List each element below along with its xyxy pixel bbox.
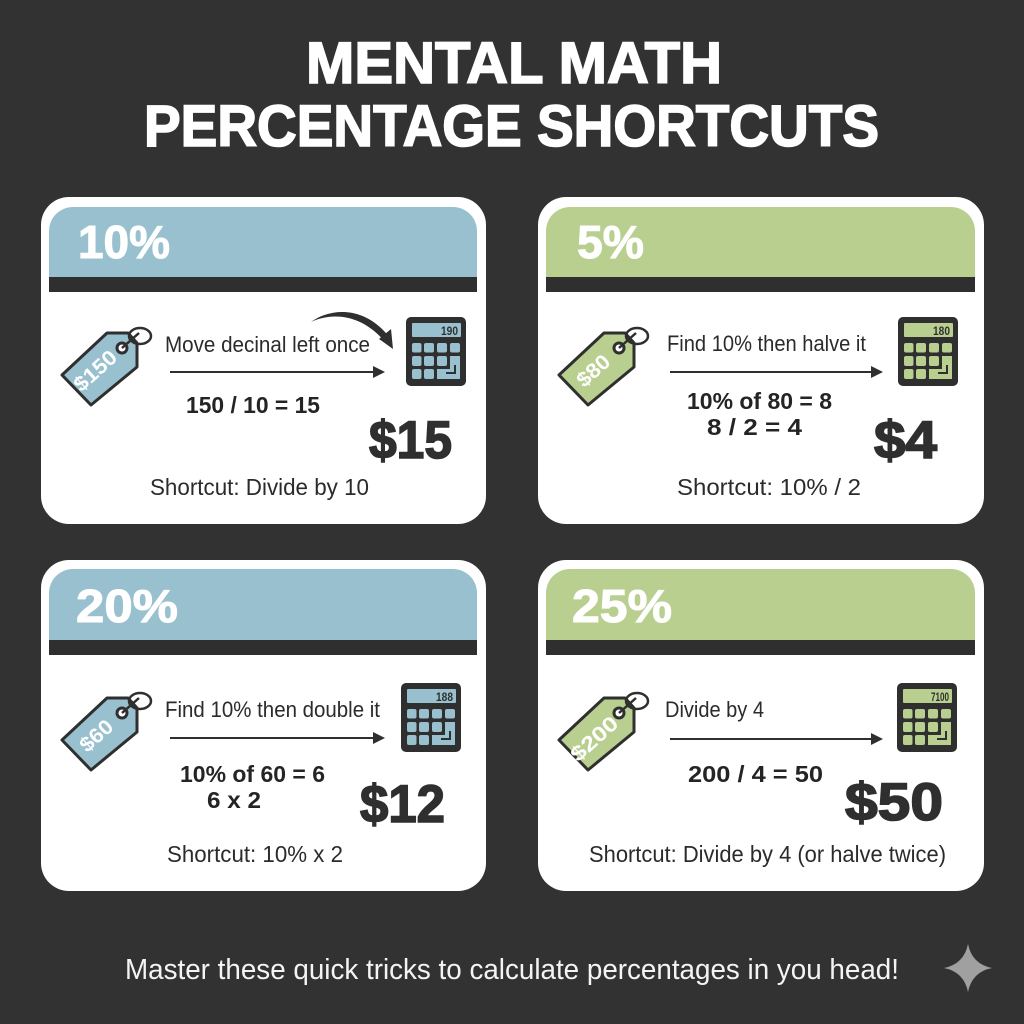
text: shortcut: Shortcut: 10% / 2 [677,474,861,500]
text: method: Find 10% then halve it [667,331,866,356]
text: calculation: 8 / 2 = 4 [707,414,802,440]
text: calculation [180,761,325,813]
text: calculation [687,388,832,440]
icon: calculator [401,683,461,752]
header: 5%: 5% [577,216,644,268]
title: MENTAL MATH [306,31,722,96]
arrow: to calculator [670,733,883,745]
icon: calculator: 7100 [931,690,949,704]
result: $12 [360,775,445,834]
arrow: to calculator [170,732,385,744]
text: method: Divide by 4 [665,697,764,722]
result: $4 [874,411,938,470]
header: 10% [49,207,477,292]
footer text: Master these quick tricks to calculate percentages in you head! [125,954,899,986]
icon: price tag $200 [559,693,648,770]
text: shortcut: Shortcut: Divide by 10 [150,474,369,500]
result: $15 [369,411,452,470]
icon: calculator [406,317,466,386]
title [144,31,879,159]
header: 20% [49,569,477,655]
header: 5% [546,207,975,292]
title: PERCENTAGE SHORTCUTS [144,94,879,159]
icon: price tag $80 [559,328,648,405]
text: calculation: 150 / 10 = 15 [186,392,320,418]
text: calculation: 10% of 80 = 8 [687,388,832,414]
arrow: to calculator [670,366,883,378]
header: 25%: 25% [572,580,672,632]
icon: calculator [897,683,957,752]
icon: calculator: 190 [441,324,458,338]
header: 25% [546,569,975,655]
icon: calculator: 180 [933,324,950,338]
text: calculation: 6 x 2 [207,787,261,813]
text: method: Move decinal left once [165,332,370,357]
arrow: curved [311,312,393,349]
result: $50 [845,773,943,832]
icon: price tag $200: $200 [566,712,623,766]
icon: price tag $150: $150 [69,346,122,396]
panel: 5% [538,197,984,524]
text: shortcut: Shortcut: 10% x 2 [167,841,343,867]
panel: 20% [41,560,486,891]
icon: price tag $80: $80 [572,350,615,392]
panel: 10% [41,197,486,524]
icon: price tag $150 [62,328,151,405]
icon: calculator [898,317,958,386]
text: shortcut: Shortcut: Divide by 4 (or halve twice) [589,841,946,867]
icon: calculator: 188 [436,690,453,704]
panel: 25% [538,560,984,891]
text: method: Find 10% then double it [165,697,380,722]
arrow: to calculator [170,366,385,378]
icon: price tag $60: $60 [75,715,118,757]
header: 20%: 20% [76,580,178,632]
header: 10%: 10% [78,216,170,268]
text: calculation: 10% of 60 = 6 [180,761,325,787]
icon: price tag $60 [62,693,151,770]
text: calculation: 200 / 4 = 50 [688,761,823,787]
icon: sparkle [944,944,992,992]
